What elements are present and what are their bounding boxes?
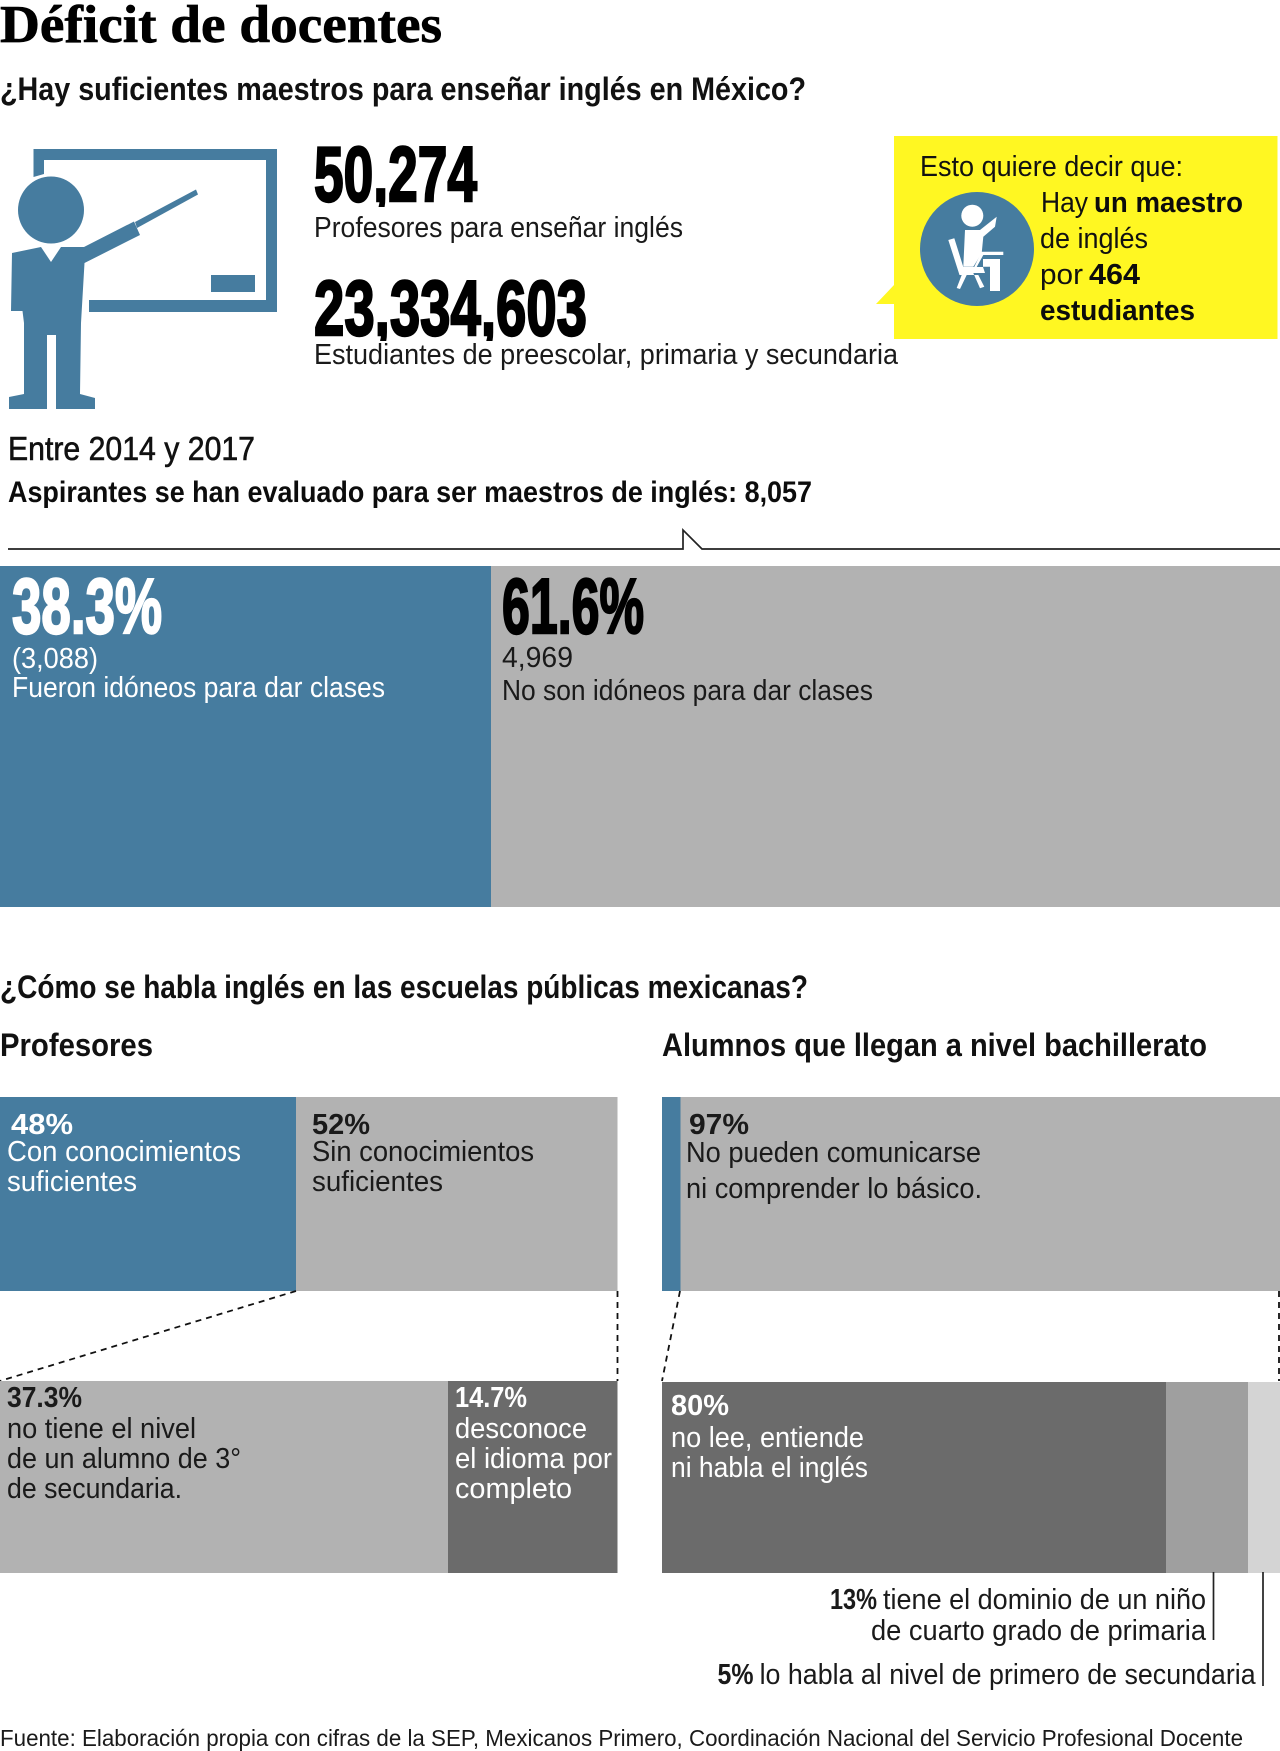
callout: one teacher per 464 students: 464 [1089, 259, 1140, 291]
panel: students breakdown bar [662, 1382, 1280, 1573]
heading: period: Entre 2014 y 2017 [8, 430, 255, 467]
source: Fuente: Elaboración propia con cifras de la SEP, Mexicanos Primero, Coordinación Nacional del Servicio Profesional Docente [0, 1725, 1243, 1751]
callout: 13%: 13% [830, 1584, 877, 1616]
panel: below third-grade level: de secundaria. [7, 1473, 182, 1505]
panel: below third-grade level [0, 1381, 448, 1573]
callout: one teacher per 464 students: por [1040, 259, 1083, 291]
callout: one teacher per 464 students: Hay [1041, 187, 1088, 219]
callout: 13%: tiene el dominio de un niño [883, 1584, 1206, 1616]
callout: 5% [718, 1572, 1263, 1691]
panel: below third-grade level: no tiene el nivel [7, 1413, 196, 1445]
panel: teachers with sufficient knowledge [0, 1097, 296, 1291]
panel: suitable applicants [0, 562, 491, 907]
callout: one teacher per 464 students [876, 136, 1278, 339]
panel: suitable applicants: (3,088) [12, 643, 98, 675]
heading: high school students: Alumnos que llegan a nivel bachillerato [662, 1027, 1207, 1063]
icon: teacher pointing at board [9, 149, 277, 409]
icon: student at desk [920, 192, 1034, 306]
panel: teachers with sufficient knowledge: suficientes [7, 1166, 137, 1198]
panel: below third-grade level: 37.3% [7, 1382, 82, 1414]
panel: teachers without sufficient knowledge: 52% [312, 1109, 370, 1141]
text: applicants evaluated: Aspirantes se han evaluado para ser maestros de inglés: 8,057 [8, 476, 812, 509]
stat: teachers count: 50,274 [314, 130, 477, 218]
callout: one teacher per 464 students: un maestro [1094, 187, 1243, 219]
panel: unsuitable applicants: 61.6% [502, 562, 644, 650]
panel: no knowledge of language: el idioma por [455, 1443, 612, 1475]
heading: are there enough teachers: ¿Hay suficientes maestros para enseñar inglés en México? [0, 71, 806, 107]
callout: 13%: de cuarto grado de primaria [871, 1615, 1207, 1647]
heading: how English is spoken: ¿Cómo se habla inglés en las escuelas públicas mexicanas? [0, 969, 808, 1005]
panel: teachers without sufficient knowledge: suficientes [312, 1166, 443, 1198]
panel: students bar 97%: 97% [689, 1109, 749, 1141]
label: students: Estudiantes de preescolar, primaria y secundaria [314, 339, 899, 371]
panel: teachers without sufficient knowledge: Sin conocimientos [312, 1136, 534, 1168]
callout: one teacher per 464 students: de inglés [1040, 223, 1148, 255]
label: teachers: Profesores para enseñar inglés [314, 212, 683, 244]
panel: students breakdown bar: 80% [671, 1390, 729, 1422]
stat: students count: 23,334,603 [314, 264, 587, 352]
panel: no knowledge of language: desconoce [455, 1413, 587, 1445]
panel: unsuitable applicants: 4,969 [502, 642, 573, 674]
panel: students bar 97% [662, 1097, 1280, 1291]
panel: students bar 97%: ni comprender lo básico. [686, 1173, 982, 1205]
panel: suitable applicants: 38.3% [12, 562, 162, 650]
panel: teachers with sufficient knowledge: 48% [11, 1109, 73, 1141]
panel: no knowledge of language: completo [455, 1473, 572, 1505]
panel: students breakdown bar: ni habla el inglés [671, 1452, 868, 1484]
panel: unsuitable applicants [491, 562, 1280, 907]
panel: no knowledge of language: 14.7% [455, 1382, 527, 1414]
panel: unsuitable applicants: No son idóneos para dar clases [502, 675, 873, 707]
panel: teachers with sufficient knowledge: Con conocimientos [7, 1136, 241, 1168]
callout: 5%: 5% [718, 1659, 754, 1691]
panel: teachers without sufficient knowledge [296, 1097, 618, 1291]
callout: 13% [830, 1572, 1214, 1647]
panel: students bar 97%: No pueden comunicarse [686, 1137, 981, 1169]
panel: no knowledge of language [448, 1381, 618, 1573]
panel: students breakdown bar: no lee, entiende [671, 1422, 864, 1454]
panel: below third-grade level: de un alumno de 3° [7, 1443, 241, 1475]
panel: suitable applicants: Fueron idóneos para dar clases [12, 672, 385, 704]
callout: one teacher per 464 students: estudiantes [1040, 295, 1195, 327]
callout: one teacher per 464 students: Esto quiere decir que: [920, 151, 1183, 183]
heading: teachers: Profesores [0, 1027, 153, 1063]
